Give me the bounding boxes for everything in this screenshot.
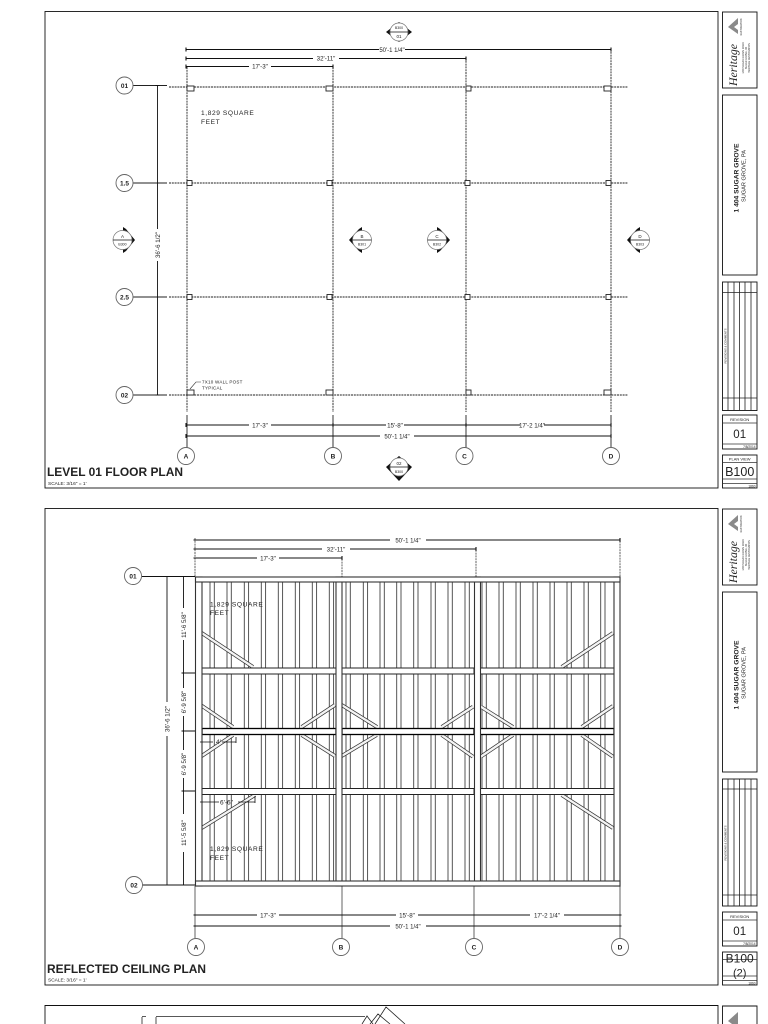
scale note: SCALE: 3/16" = 1' <box>48 481 87 487</box>
logo block: RESTORATION <box>740 18 743 36</box>
section marker: bottom: 02 <box>396 461 402 466</box>
revision box <box>722 415 757 449</box>
post callout: TYPICAL <box>202 386 223 390</box>
dimension lines: top of ceiling plan: 17'-3" <box>260 556 276 562</box>
area label: top: FEET <box>210 610 229 617</box>
area label: FEET <box>201 119 220 126</box>
dimension lines: top of floor plan: 32'-11" <box>317 56 335 62</box>
dimension lines: bottom of ceiling plan: 15'-8" <box>399 912 415 920</box>
title: level 01 floor plan: LEVEL 01 FLOOR PLAN <box>47 465 183 479</box>
bubble labels: D <box>618 944 623 951</box>
dimension lines: left of ceiling plan: 11'-5 5/8" <box>181 820 188 846</box>
sidebar: sheet 2 <box>722 509 757 985</box>
panel: level 01 floor plan <box>45 12 718 488</box>
dimension lines: left of ceiling plan: 6'-9 5/8" <box>181 753 188 775</box>
section marker: A: B300 <box>118 242 127 246</box>
plan view box <box>722 455 757 488</box>
section marker: D: B303 <box>636 242 644 246</box>
panel: third sheet cropped <box>45 1006 718 1024</box>
dimension lines: top of floor plan: 50'-1 1/4" <box>379 48 405 54</box>
column and row bubbles <box>124 568 628 956</box>
bubble labels: 2.5 <box>120 294 129 301</box>
inner dimension: 4 feet <box>200 737 236 746</box>
project title block: SUGAR GROVE, PA <box>742 646 748 699</box>
bubble labels: C <box>472 944 477 951</box>
framing: diagonal braces <box>202 633 613 828</box>
dimension lines: top of ceiling plan <box>194 538 620 577</box>
revision table: REVISIONS & COMMENTS <box>724 825 728 860</box>
section marker: D <box>627 227 650 253</box>
section marker: top: 01 <box>396 34 402 39</box>
dimension lines: top of floor plan: 17'-3" <box>252 64 268 70</box>
revision box: 7/8/2014 <box>743 942 756 946</box>
project title block <box>722 592 757 772</box>
revision box: REVISION <box>730 417 749 422</box>
logo block: 1404 SUGAR GROVE ROAD <box>742 42 745 74</box>
framing: studs <box>210 582 605 881</box>
plan view box: 1860 <box>748 484 756 488</box>
logo block: Heritage <box>726 540 740 584</box>
section marker: top: B300 <box>395 26 403 30</box>
logo block: RESTORATION <box>740 515 743 533</box>
bubble labels: B <box>339 944 344 951</box>
area label: bottom: 1,829 SQUARE <box>210 846 263 853</box>
bubble labels: D <box>609 453 614 460</box>
project title block: 1 404 SUGAR GROVE <box>734 640 740 710</box>
plan view box: PLAN VIEW <box>729 456 751 462</box>
section marker: bottom <box>386 456 412 481</box>
dimension: overall height: 36'-6 1/2" <box>155 232 162 258</box>
section marker: B: B301 <box>358 242 366 246</box>
revision box: REVISION <box>730 914 749 919</box>
revision table <box>722 282 757 410</box>
revision box: 01 <box>733 926 746 938</box>
plan view box: 1860 <box>748 981 756 985</box>
revision table <box>722 779 757 906</box>
dimension lines: bottom of floor plan: 17'-2 1/4" <box>519 422 545 430</box>
section marker: B: B <box>360 234 364 239</box>
section marker: C: C <box>435 234 439 239</box>
dimension lines: left of ceiling plan: 36'-6 1/2" <box>164 706 172 732</box>
section marker: C <box>428 227 450 253</box>
section marker: D: D <box>638 234 642 239</box>
logo block <box>722 12 757 88</box>
logo block: 1404 SUGAR GROVE ROAD <box>742 539 745 571</box>
dimension lines: left of ceiling plan <box>142 576 195 885</box>
dimension lines: bottom of floor plan: 17'-3" <box>252 422 268 430</box>
inner dimension: 6 feet 6 inches: 6'-6" <box>220 800 234 806</box>
section marker: A <box>113 227 135 253</box>
logo block <box>722 509 757 585</box>
grid lines: floor plan <box>133 49 628 448</box>
inner dimension: 6 feet 6 inches <box>200 796 255 806</box>
bubble labels: B <box>331 453 336 460</box>
dimension lines: bottom of ceiling plan: 17'-2 1/4" <box>534 912 560 920</box>
plan view box: (2) <box>733 968 746 980</box>
project title block <box>722 95 757 275</box>
dimension lines: left of ceiling plan: 6'-9 5/8" <box>181 691 188 713</box>
bubble labels <box>129 573 623 951</box>
dimension lines: bottom of ceiling plan: 17'-3" <box>260 912 276 920</box>
section marker: A: A <box>121 234 124 239</box>
inner dimension: 4 feet: 4' <box>216 739 221 746</box>
revision box: 7/8/2014 <box>743 445 756 449</box>
post callout <box>190 380 243 390</box>
dimension lines: top of floor plan <box>186 48 611 70</box>
dimension: overall height <box>155 85 162 395</box>
project title block: 1 404 SUGAR GROVE <box>734 143 740 212</box>
logo block: Heritage <box>726 43 740 87</box>
framing: horizontal blocking <box>202 668 614 794</box>
dimension lines: top of ceiling plan: 50'-1 1/4" <box>395 538 421 544</box>
section marker: B <box>349 227 372 253</box>
bubble labels: 01 <box>129 573 137 580</box>
section marker: top <box>386 22 412 42</box>
logo block: HERITAGE RESTORATION <box>748 43 751 73</box>
area label: top: 1,829 SQUARE <box>210 602 263 608</box>
bubble labels: C <box>462 453 467 460</box>
logo block: SUGAR GROVE, PA <box>745 47 748 69</box>
panel: reflected ceiling plan <box>45 508 718 985</box>
bubble labels <box>120 83 614 460</box>
dimension lines: bottom of floor plan <box>186 422 611 440</box>
section marker: C: B302 <box>433 242 441 246</box>
post callout: 7X10 WALL POST <box>202 380 243 384</box>
project title block: SUGAR GROVE, PA <box>742 149 748 202</box>
bubble labels: 02 <box>130 882 138 889</box>
logo block: SUGAR GROVE, PA <box>745 544 748 566</box>
sidebar: sheet 1 <box>722 12 757 488</box>
row bubbles <box>116 77 620 464</box>
logo block: HERITAGE RESTORATION <box>748 540 751 570</box>
bubble labels: 02 <box>121 392 128 399</box>
framing: plates and posts <box>196 577 620 886</box>
bubble labels: A <box>184 453 189 460</box>
area label: bottom: FEET <box>210 855 229 862</box>
dimension lines: bottom of floor plan: 15'-8" <box>387 422 403 430</box>
bubble labels: A <box>194 944 199 951</box>
dimension lines: bottom of floor plan: 50'-1 1/4" <box>384 434 410 440</box>
bubble labels: 1.5 <box>120 180 129 187</box>
revision table: REVISIONS & COMMENTS <box>724 328 728 363</box>
dimension lines: bottom of ceiling plan: 50'-1 1/4" <box>395 924 421 930</box>
dimension lines: left of ceiling plan: 11'-6 5/8" <box>181 612 188 638</box>
section marker: bottom: B300 <box>395 470 403 474</box>
area label: 1,829 SQUARE <box>201 110 254 117</box>
plan view box: B100 <box>725 465 754 479</box>
dimension lines: top of ceiling plan: 32'-11" <box>327 546 345 554</box>
plan view box <box>722 952 757 985</box>
revision box <box>722 912 757 946</box>
title: reflected ceiling plan: REFLECTED CEILING PLAN <box>47 962 206 976</box>
dimension lines: bottom of ceiling plan <box>194 886 622 938</box>
plan view box: B100 <box>726 952 754 966</box>
bubble labels: 01 <box>121 83 128 90</box>
scale note: SCALE: 3/16" = 1' <box>48 978 87 984</box>
revision box: 01 <box>733 429 746 441</box>
wall posts <box>187 86 611 395</box>
sidebar: sheet 3 cropped <box>722 1006 757 1024</box>
roof section fragment <box>142 1007 405 1024</box>
